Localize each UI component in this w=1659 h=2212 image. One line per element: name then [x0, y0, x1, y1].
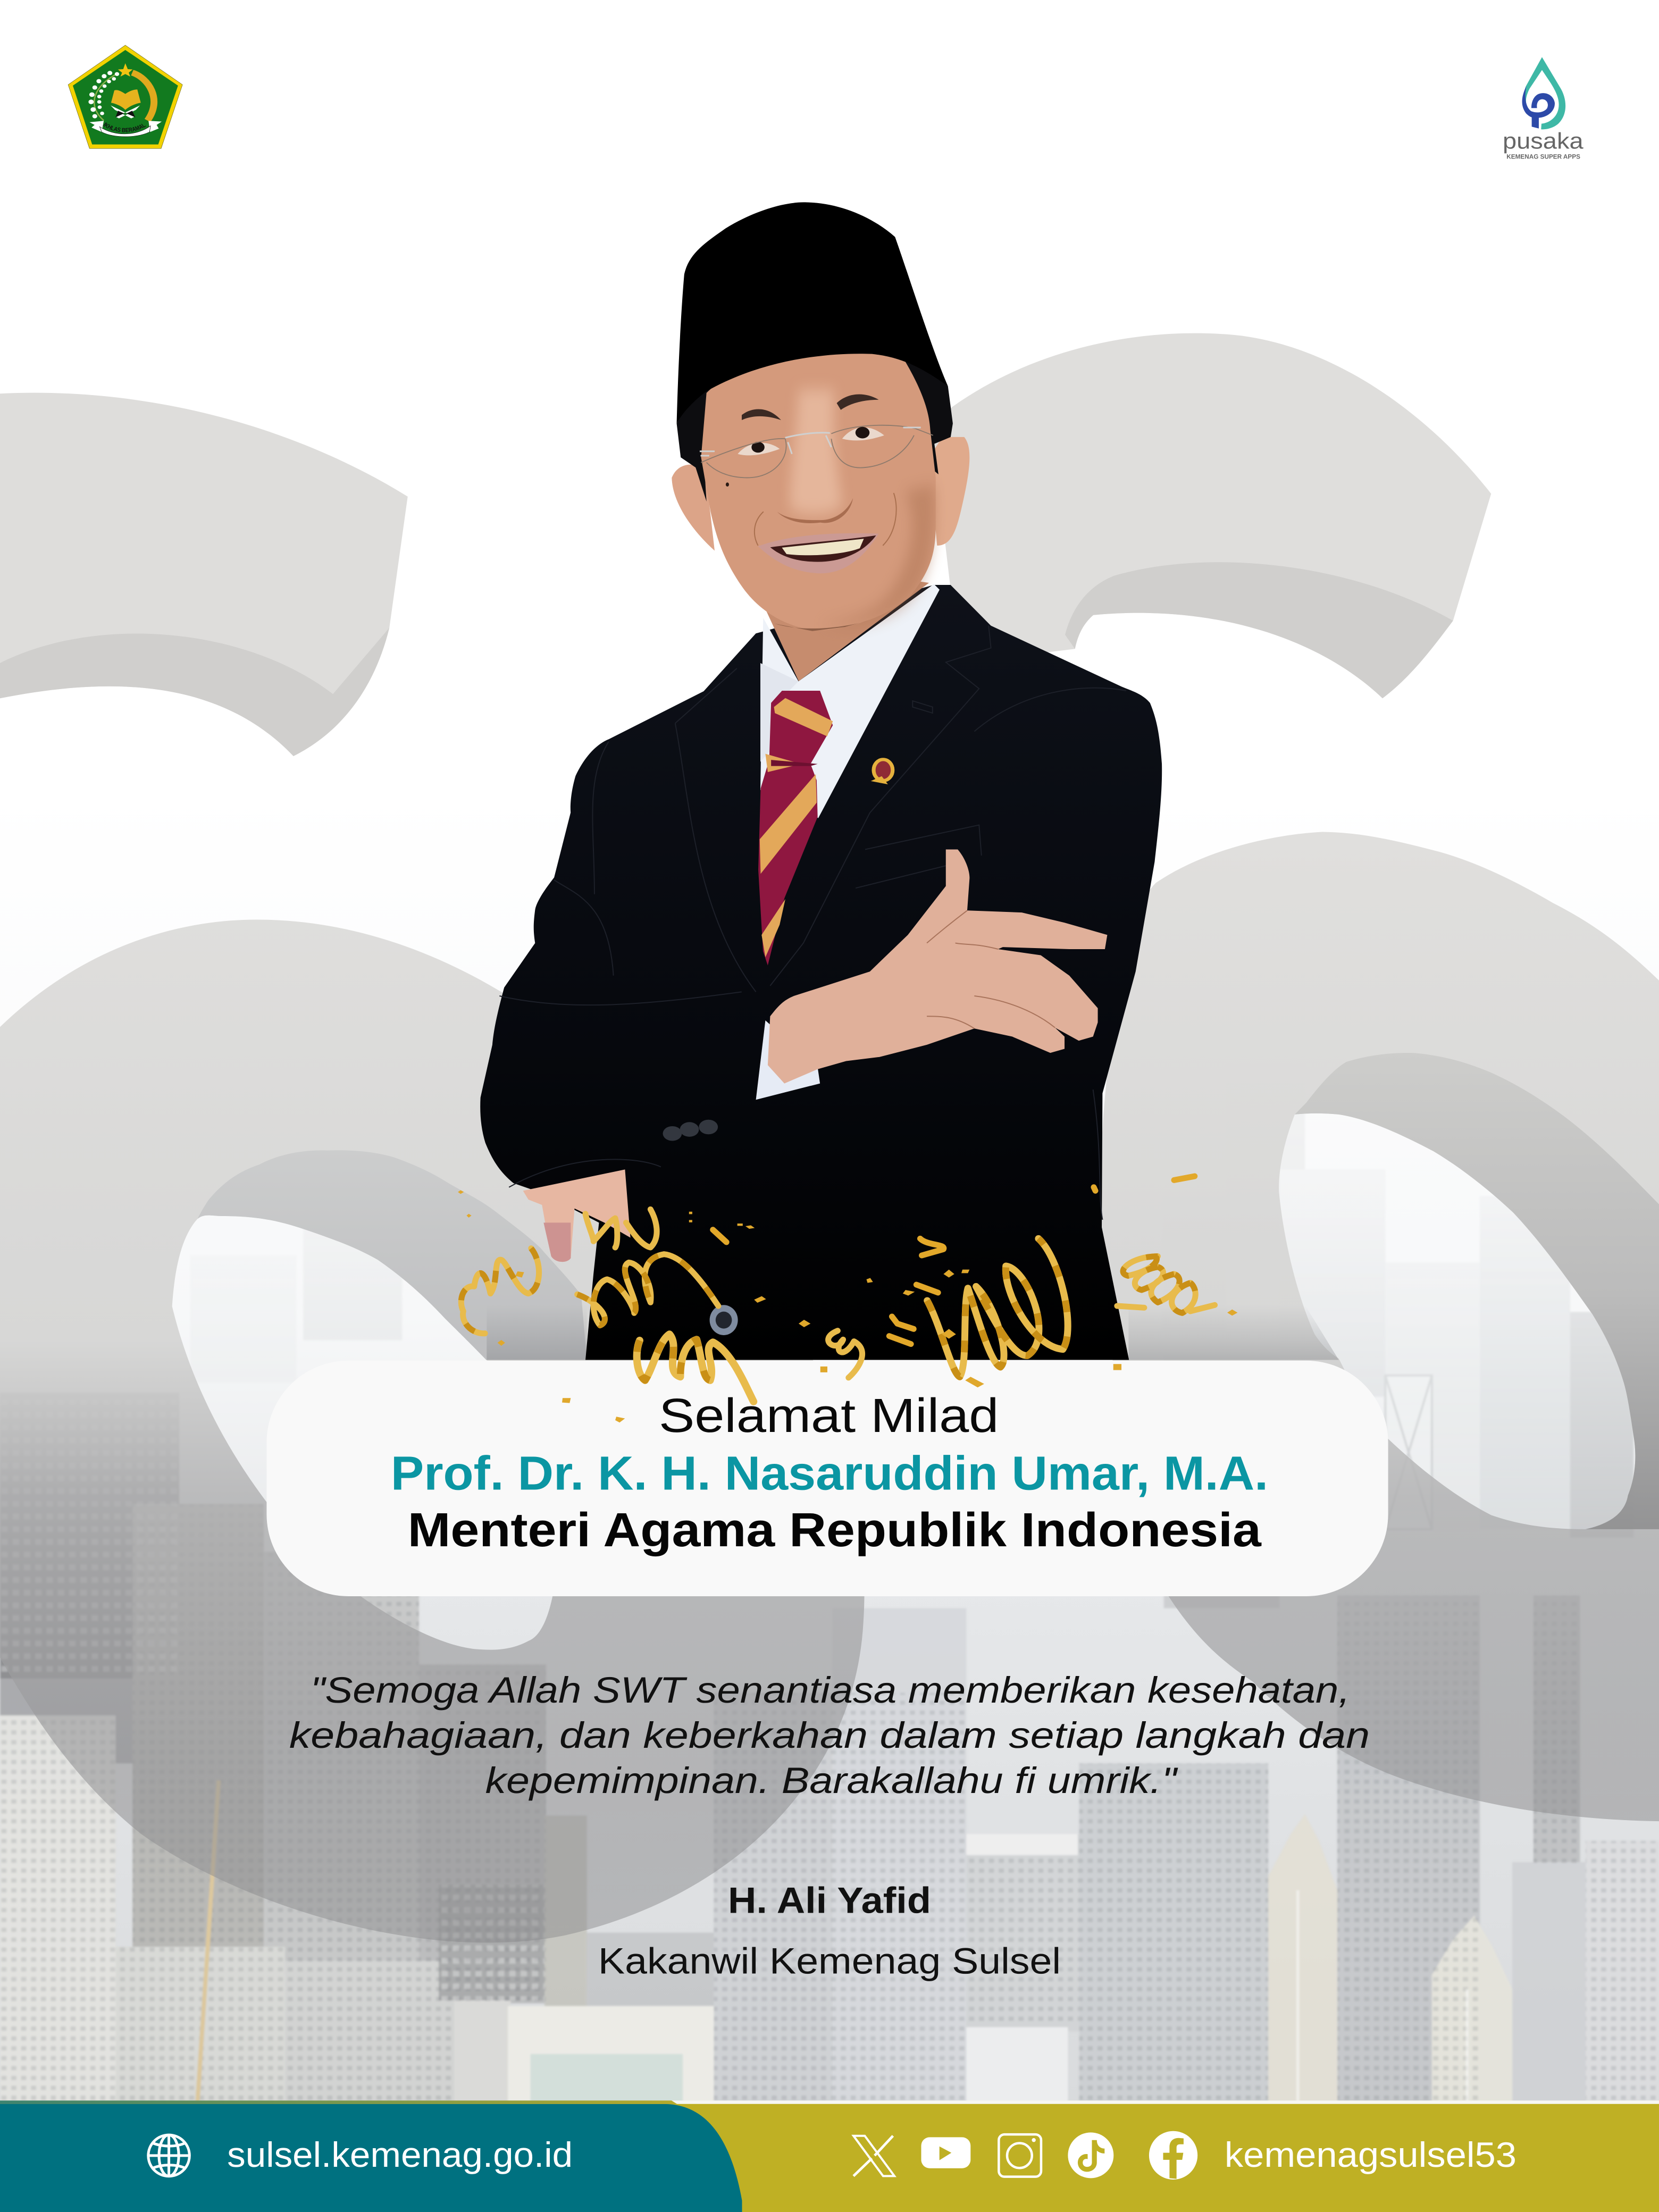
footer teal website panel: [0, 2104, 742, 2212]
eyes: [738, 443, 780, 455]
big number 66: right six top stroke: [931, 333, 1491, 698]
icon: YouTube: [921, 2137, 970, 2168]
soft shadow above name card: [487, 1305, 1339, 1360]
finger lines: [927, 910, 1055, 1028]
head: [672, 202, 969, 681]
logo: Pusaka Kemenag Super Apps: KEMENAG SUPER APPS: [1506, 153, 1580, 160]
nose and forehead highlights: [790, 390, 842, 514]
blessing quote: "Semoga Allah SWT senantiasa memberikan kesehatan,: [311, 1669, 1350, 1711]
cheek shading: [818, 484, 935, 625]
glasses: [700, 425, 933, 477]
minister title: Menteri Agama Republik Indonesia: [408, 1504, 1263, 1557]
tie: [758, 691, 833, 966]
jacket button: [710, 1305, 738, 1335]
blessing quote: kepemimpinan. Barakallahu fi umrik.": [485, 1759, 1179, 1802]
footer bar: [0, 2100, 1659, 2212]
minister name: Prof. Dr. K. H. Nasaruddin Umar, M.A.: [391, 1447, 1268, 1501]
name card: [266, 1361, 1388, 1596]
website text: sulsel.kemenag.go.id: [227, 2136, 573, 2175]
logo: Pusaka Kemenag Super Apps: pusaka: [1503, 128, 1583, 154]
logo: Kementerian Agama emblem: [68, 45, 183, 149]
right ear: [929, 437, 969, 546]
logo: Kementerian Agama emblem: IKHLAS BERAMAL: [103, 122, 146, 132]
big number 66: left six top stroke: [0, 393, 408, 756]
left ear: [672, 465, 715, 551]
sender title: Kakanwil Kemenag Sulsel: [598, 1940, 1061, 1982]
sleeve buttons: [663, 1120, 718, 1141]
nose: [777, 498, 853, 523]
suit: [480, 585, 1162, 1360]
suit details: [499, 625, 1126, 1220]
big number 66: right six ring: [1100, 832, 1659, 1821]
eyebrows: [742, 409, 781, 420]
greeting line: Selamat Milad: [659, 1389, 999, 1443]
right hand on arm: [768, 849, 1107, 1084]
golden confetti pieces: [458, 1190, 1237, 1422]
left hand under arm: [523, 1169, 631, 1262]
smile folds: [755, 493, 896, 546]
golden confetti ribbons: [461, 1176, 1215, 1402]
lips and teeth: [758, 533, 879, 573]
social handle text: kemenagsulsel53: [1225, 2136, 1516, 2175]
shirt and collar: [760, 584, 940, 818]
icon: TikTok: [1068, 2132, 1113, 2178]
icon: Facebook: [1149, 2131, 1197, 2180]
peci hat: [677, 202, 948, 423]
lapel pin: [871, 759, 893, 784]
sender name: H. Ali Yafid: [728, 1879, 931, 1921]
logo: Pusaka Kemenag Super Apps: [1503, 57, 1583, 160]
icon: Instagram: [999, 2134, 1041, 2177]
background: white fading to city: [0, 1113, 1659, 2100]
hair: [677, 336, 953, 501]
blessing quote: [289, 1669, 1370, 1802]
shirt cuff: [756, 1020, 820, 1100]
neck: [758, 576, 929, 681]
portrait: Prof. Nasaruddin Umar: [480, 202, 1162, 1360]
big number 66: left six ring: [0, 919, 865, 1943]
face: [701, 350, 936, 630]
icon: globe: [148, 2135, 189, 2176]
icon: X: [853, 2136, 894, 2176]
blessing quote: kebahagiaan, dan keberkahan dalam setiap langkah dan: [289, 1714, 1370, 1756]
